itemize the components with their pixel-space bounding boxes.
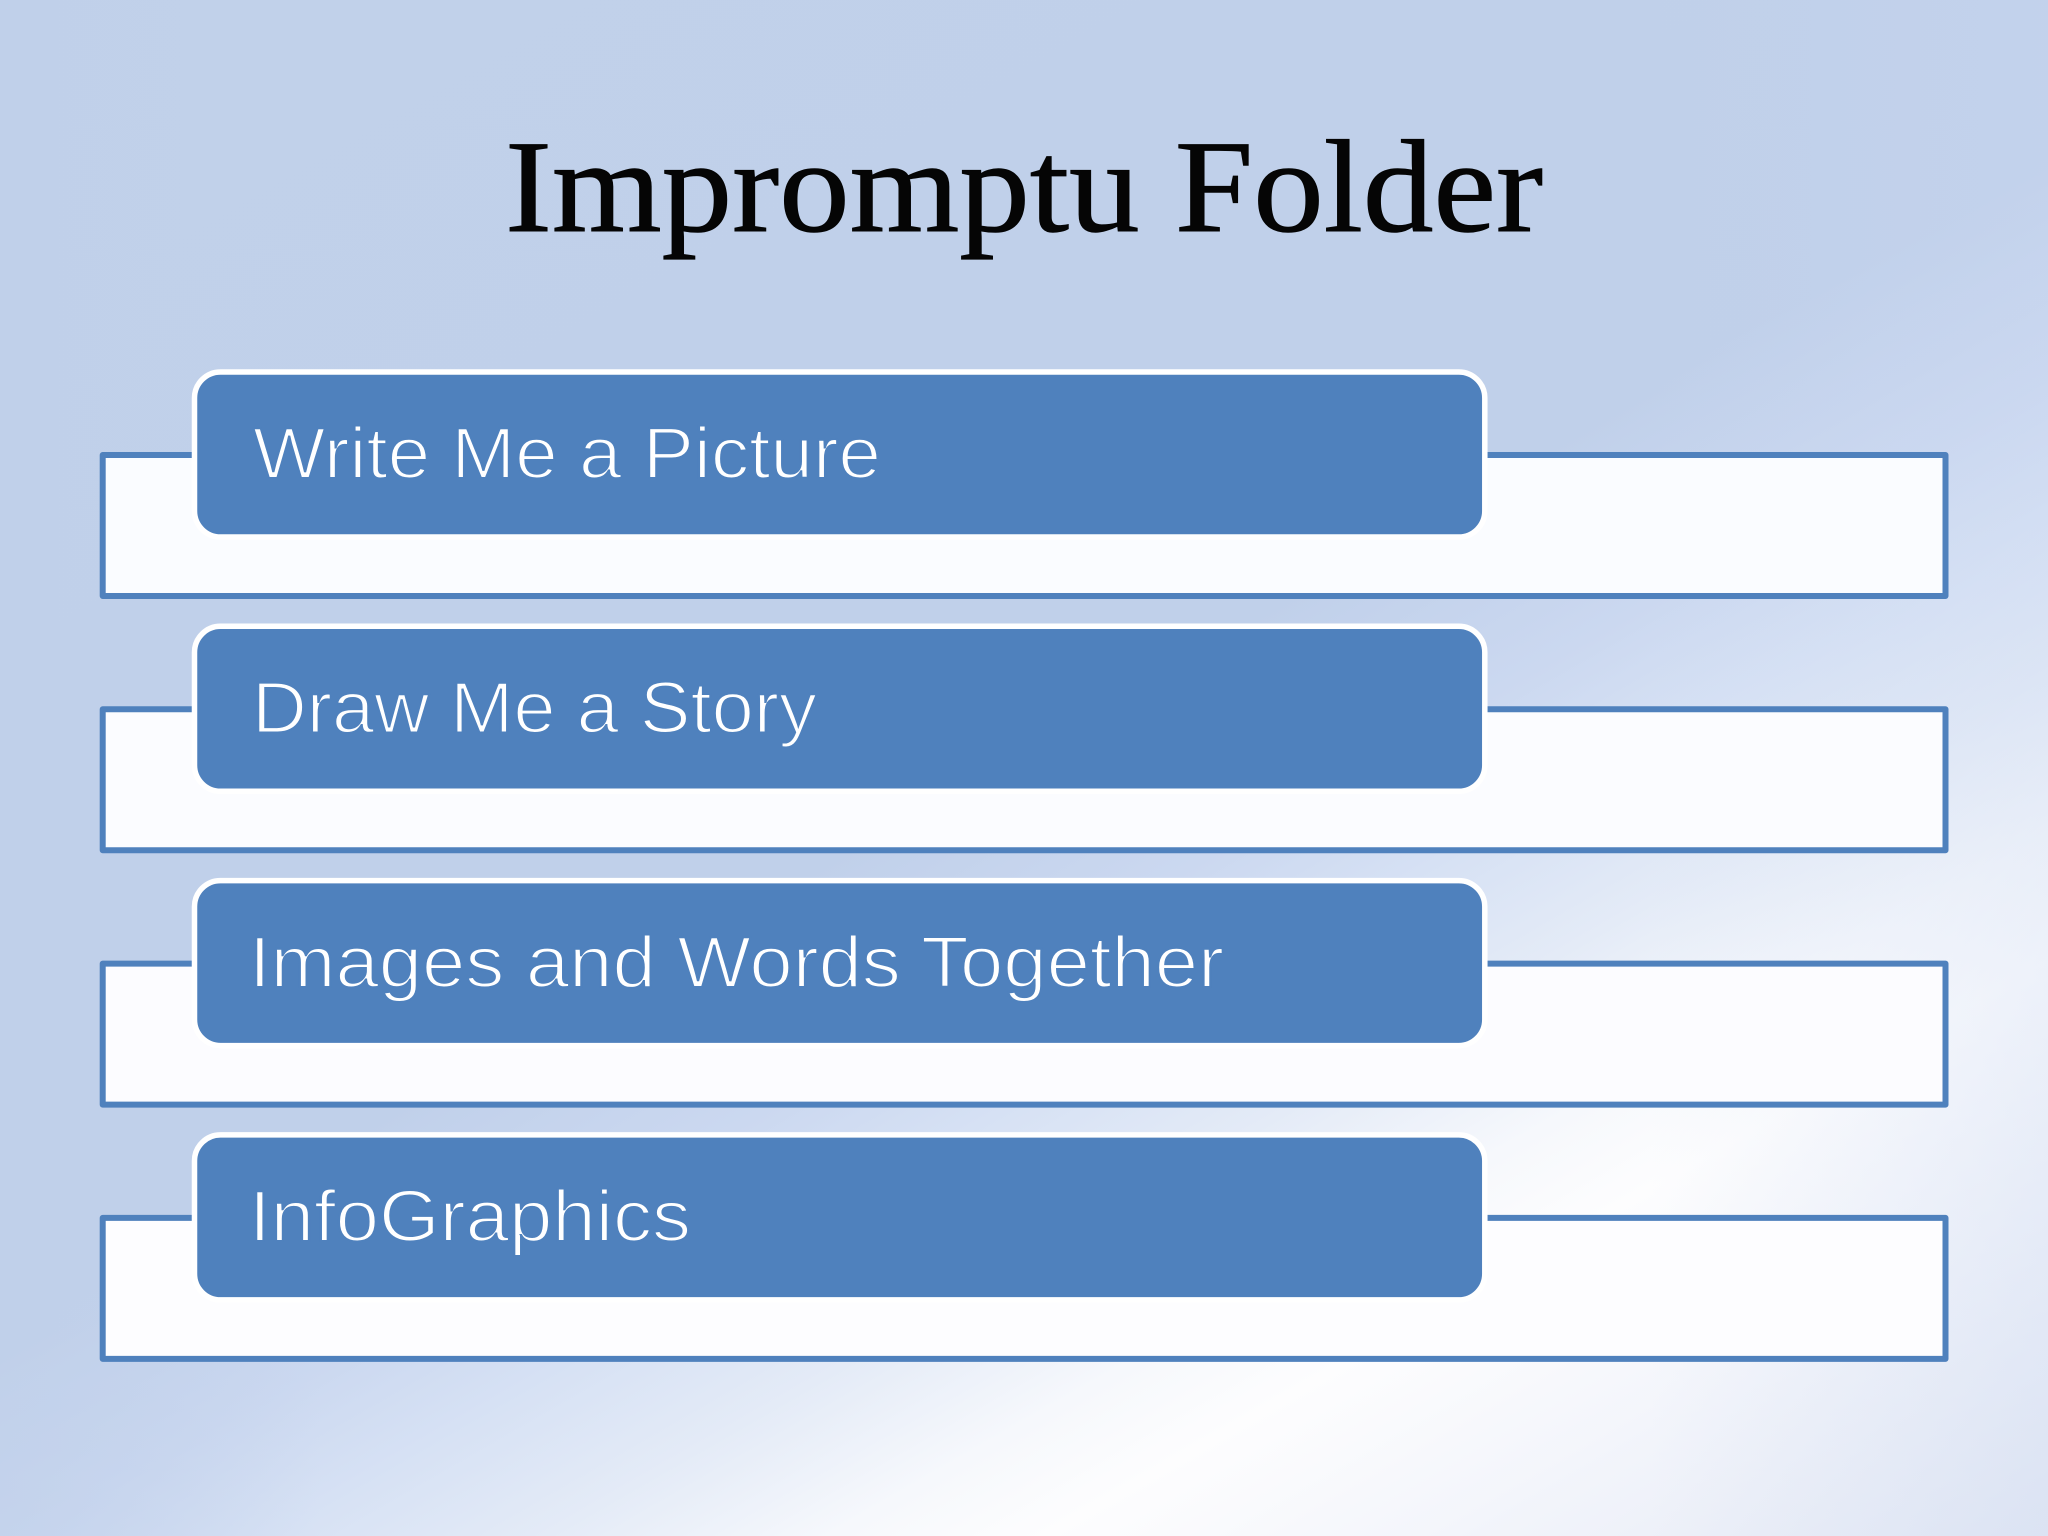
folder panel 2	[103, 709, 1946, 850]
tab 4	[194, 1135, 1485, 1300]
tab 3	[194, 881, 1485, 1046]
row 3: Images and Words Together	[103, 881, 1946, 1105]
tab 2 label: Draw Me a Story	[252, 668, 817, 748]
tab 4 label: InfoGraphics	[249, 1177, 691, 1257]
tab 1 label: Write Me a Picture	[253, 414, 881, 494]
tab 1	[194, 372, 1485, 537]
folder panel 1	[103, 455, 1946, 596]
row 1: Write Me a Picture	[103, 372, 1946, 596]
title: Impromptu Folder	[505, 113, 1543, 260]
folder panel 3	[103, 964, 1946, 1105]
row 2: Draw Me a Story	[103, 626, 1946, 850]
row 4: InfoGraphics	[103, 1135, 1946, 1359]
tab 3 label: Images and Words Together	[249, 923, 1224, 1003]
tab 2	[194, 626, 1485, 791]
folder panel 4	[103, 1218, 1946, 1359]
